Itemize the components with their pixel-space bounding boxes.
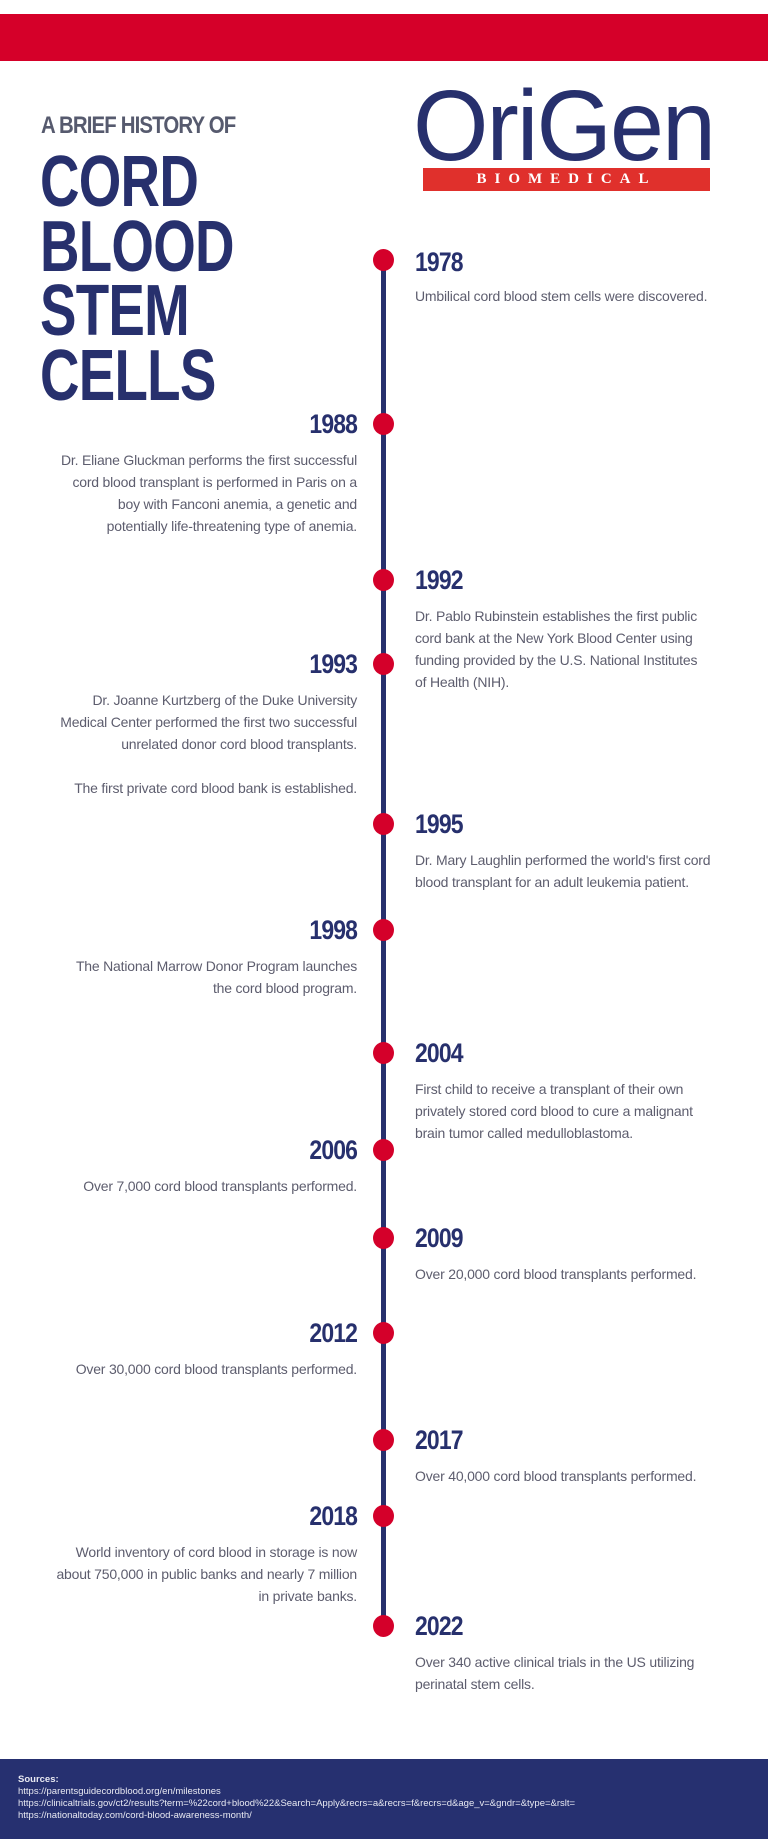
- text: Dr. Pablo Rubinstein establishes the first public: [415, 608, 697, 624]
- text: unrelated donor cord blood transplants.: [121, 736, 357, 752]
- event 2012: [373, 1322, 394, 1344]
- text: 2017: [415, 1425, 463, 1455]
- event 1993: [373, 653, 394, 675]
- text: in private banks.: [258, 1588, 357, 1604]
- text: 1988: [309, 409, 357, 439]
- text: potentially life-threatening type of anemia.: [107, 518, 357, 534]
- title: CELLS: [40, 336, 216, 416]
- top red bar: [0, 14, 768, 61]
- text: of Health (NIH).: [415, 674, 509, 690]
- event 2017: [373, 1429, 394, 1451]
- text: Over 20,000 cord blood transplants performed.: [415, 1266, 696, 1282]
- text: 1992: [415, 565, 463, 595]
- footer sources: [0, 1759, 768, 1839]
- text: 1995: [415, 809, 463, 839]
- text: privately stored cord blood to cure a malignant: [415, 1103, 693, 1119]
- text: 2018: [309, 1501, 357, 1531]
- text: about 750,000 in public banks and nearly 7 million: [56, 1566, 357, 1582]
- footer sources: Sources:: [18, 1774, 59, 1785]
- text: the cord blood program.: [213, 980, 357, 996]
- text: 2022: [415, 1611, 463, 1641]
- text: cord blood transplant is performed in Paris on a: [72, 474, 357, 490]
- text: brain tumor called medulloblastoma.: [415, 1125, 633, 1141]
- event 1988: [373, 413, 394, 435]
- logo biomedical bar: BIOMEDICAL: [476, 171, 656, 187]
- text: Over 340 active clinical trials in the US utilizing: [415, 1654, 694, 1670]
- text: The first private cord blood bank is established.: [74, 780, 357, 796]
- text: 2012: [309, 1318, 357, 1348]
- text: funding provided by the U.S. National Institutes: [415, 652, 697, 668]
- text: blood transplant for an adult leukemia patient.: [415, 874, 689, 890]
- title: CORD: [40, 142, 198, 222]
- event 1998: [373, 919, 394, 941]
- title: BLOOD: [40, 206, 234, 286]
- text: Dr. Eliane Gluckman performs the first successful: [61, 452, 357, 468]
- event 1978: [373, 247, 707, 304]
- text: Over 30,000 cord blood transplants performed.: [76, 1361, 357, 1377]
- text: The National Marrow Donor Program launches: [76, 958, 357, 974]
- timeline line: [381, 262, 386, 1626]
- title: [40, 142, 234, 416]
- footer sources: https://clinicaltrials.gov/ct2/results?term=%22cord+blood%22&Search=Apply&recrs=a&recrs=f&recrs=d&age_v=&gndr=&type=&rslt=: [18, 1798, 575, 1809]
- text: perinatal stem cells.: [415, 1676, 535, 1692]
- event 1995: [373, 813, 394, 835]
- text: cord bank at the New York Blood Center using: [415, 630, 693, 646]
- title: STEM: [40, 271, 189, 351]
- event 1992: [373, 569, 394, 591]
- event 2018: [373, 1505, 394, 1527]
- text: World inventory of cord blood in storage is now: [76, 1544, 357, 1560]
- event 2009: [373, 1227, 394, 1249]
- event 2006: [373, 1139, 394, 1161]
- text: Dr. Mary Laughlin performed the world's first cord: [415, 852, 710, 868]
- logo wordmark: OriGen: [413, 70, 714, 182]
- subtitle: A BRIEF HISTORY OF: [41, 112, 235, 139]
- text: Dr. Joanne Kurtzberg of the Duke University: [92, 692, 357, 708]
- text: 2006: [309, 1135, 357, 1165]
- event 1978: 1978: [415, 247, 463, 277]
- text: Medical Center performed the first two successful: [60, 714, 357, 730]
- logo: [413, 70, 714, 191]
- text: Over 7,000 cord blood transplants performed.: [83, 1178, 357, 1194]
- text: First child to receive a transplant of their own: [415, 1081, 683, 1097]
- footer sources: https://parentsguidecordblood.org/en/milestones: [18, 1786, 221, 1797]
- text: boy with Fanconi anemia, a genetic and: [118, 496, 357, 512]
- text: Over 40,000 cord blood transplants performed.: [415, 1468, 696, 1484]
- text: 1993: [309, 649, 357, 679]
- footer sources: https://nationaltoday.com/cord-blood-awareness-month/: [18, 1810, 252, 1821]
- text: 2004: [415, 1038, 463, 1068]
- event 2022: [373, 1615, 394, 1637]
- event 2004: [373, 1042, 394, 1064]
- text: 1998: [309, 915, 357, 945]
- logo biomedical bar: [423, 168, 710, 191]
- event 1978: Umbilical cord blood stem cells were discovered.: [415, 288, 707, 304]
- text: 2009: [415, 1223, 463, 1253]
